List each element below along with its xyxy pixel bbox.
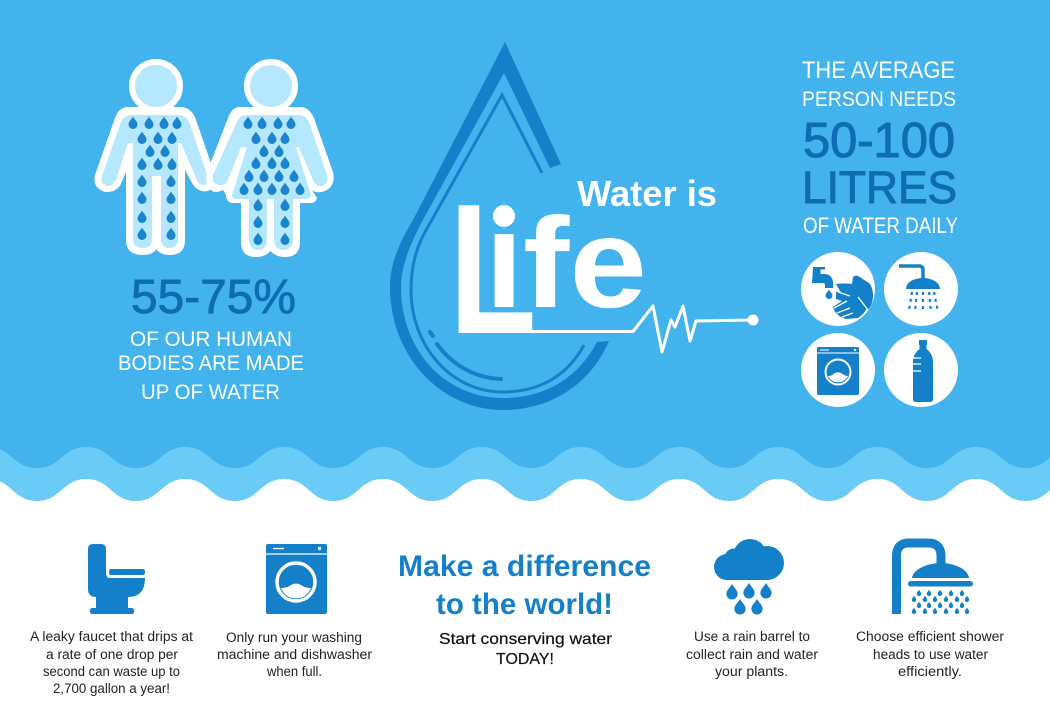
icon: water drop outline: [390, 42, 609, 410]
icon: shower large: [896, 543, 973, 614]
text: leaky faucet: A leaky faucet that drips at: [30, 629, 193, 644]
text: leaky faucet: 2,700 gallon a year!: [53, 681, 170, 696]
title: Life: fe: [523, 192, 647, 335]
icon: water bottle: [884, 333, 958, 407]
text: body water caption: OF OUR HUMAN: [130, 328, 292, 351]
panel: human bodies: [94, 62, 334, 404]
title: Life: L: [449, 166, 537, 373]
panel: shower head tip: [856, 543, 1005, 679]
icon: washing hands: [801, 252, 875, 326]
text: body water caption: UP OF WATER: [141, 381, 280, 404]
text: shower tip: heads to use water: [873, 647, 989, 662]
text: shower tip: [856, 629, 1005, 679]
text: rain barrel: Use a rain barrel to: [694, 629, 810, 644]
text: start conserving water: [439, 631, 613, 668]
title: Water is: Water is: [577, 173, 717, 214]
white lower panel: [0, 479, 1050, 720]
text: rain barrel: your plants.: [715, 664, 788, 679]
text: washing tip: Only run your washing: [226, 630, 362, 645]
text: body water caption: [118, 328, 304, 404]
icon: toilet: [88, 544, 145, 614]
text: rain barrel: collect rain and water: [686, 647, 819, 662]
title: Life: i: [485, 183, 523, 337]
panel: rain barrel tip: [686, 539, 819, 679]
icon: washing machine large: [266, 544, 327, 614]
text: washing tip: machine and dishwasher: [217, 647, 373, 662]
text: washing tip: [217, 630, 373, 679]
title: Life: [458, 205, 642, 333]
stat: 50-100 litres: LITRES: [802, 162, 957, 213]
text: average person needs: THE AVERAGE: [802, 57, 955, 84]
panel: washing machine tip: [217, 544, 373, 679]
text: shower tip: efficiently.: [898, 664, 962, 679]
text: of water daily: OF WATER DAILY: [803, 213, 958, 238]
icon: female figure: [206, 62, 334, 257]
panel: water is life logo: [390, 42, 758, 410]
panel: leaky faucet tip: [30, 544, 193, 696]
stat: 55-75%: 55-75%: [131, 271, 296, 324]
text: shower tip: Choose efficient shower: [856, 629, 1005, 644]
heading: make a difference: to the world!: [436, 588, 613, 621]
text: leaky faucet: [30, 629, 193, 696]
panel: daily water need: [801, 57, 958, 407]
text: start conserving water: Start conserving water: [439, 631, 613, 648]
icon: shower: [884, 252, 958, 326]
icon: rain cloud: [714, 539, 784, 614]
text: average person needs: [802, 57, 956, 111]
text: start conserving water: TODAY!: [496, 651, 554, 668]
light wave band: [0, 447, 1050, 720]
text: leaky faucet: second can waste up to: [43, 664, 180, 679]
stat: 50-100 litres: 50-100: [803, 114, 955, 168]
heading: make a difference: [398, 550, 651, 621]
stat: 50-100 litres: [802, 114, 957, 213]
icon: male figure: [94, 62, 216, 255]
icon: washing machine: [801, 333, 875, 407]
text: leaky faucet: a rate of one drop per: [46, 647, 179, 662]
heading: make a difference: Make a difference: [398, 550, 651, 583]
text: body water caption: BODIES ARE MADE: [118, 352, 304, 375]
text: rain barrel: [686, 629, 819, 679]
text: washing tip: when full.: [266, 664, 322, 679]
text: average person needs: PERSON NEEDS: [802, 88, 956, 111]
heartbeat line: [528, 306, 758, 352]
